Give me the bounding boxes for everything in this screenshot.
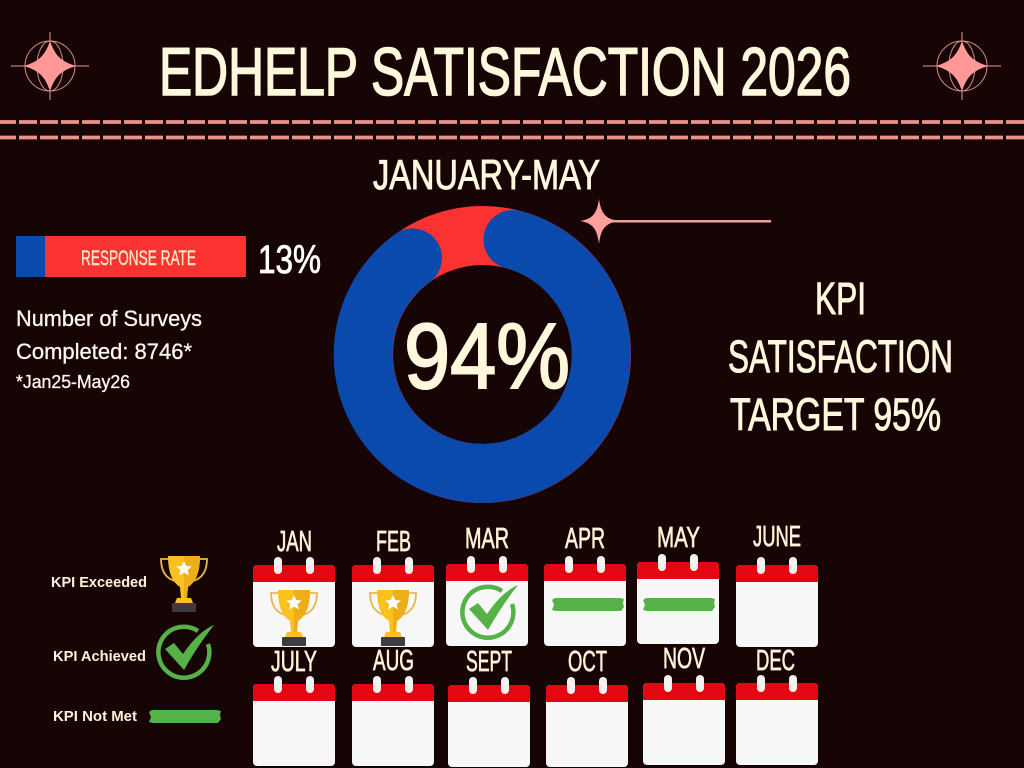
callout: sparkle line — [580, 199, 771, 244]
calendar: June — [736, 521, 818, 647]
chart: satisfaction donut — [363, 236, 602, 474]
calendar: September — [448, 646, 530, 767]
calendar: October — [546, 646, 628, 767]
calendar: February: FEB — [376, 526, 411, 558]
calendar: August: AUG — [373, 645, 414, 677]
calendar: March: MAR — [465, 523, 509, 555]
legend: KPI achieved — [53, 625, 214, 678]
calendar: December: DEC — [756, 645, 795, 677]
calendar: January: JAN — [277, 526, 312, 558]
calendar: August — [352, 645, 434, 766]
legend: KPI exceeded — [51, 556, 207, 612]
period heading: JANUARY-MAY — [373, 151, 600, 198]
icon: right sparkle globe — [923, 32, 1001, 100]
legend: KPI achieved: KPI Achieved — [53, 648, 146, 665]
calendar: June: JUNE — [753, 521, 801, 553]
calendar: November: NOV — [663, 643, 705, 675]
calendar: May: MAY — [657, 522, 700, 554]
survey count text: *Jan25-May26 — [16, 372, 130, 392]
response rate value: 13% — [258, 238, 321, 282]
survey count text: Number of Surveys — [16, 306, 202, 331]
calendar: March — [446, 523, 528, 646]
calendar: July — [253, 646, 335, 766]
legend: KPI not met: KPI Not Met — [53, 708, 137, 725]
legend: KPI not met — [53, 708, 221, 725]
calendar: October: OCT — [568, 646, 607, 678]
legend: KPI exceeded: KPI Exceeded — [51, 574, 147, 591]
calendar: December — [736, 645, 818, 765]
survey count text: Completed: 8746* — [16, 339, 192, 364]
KPI target text: TARGET 95% — [730, 389, 941, 440]
response rate bar: RESPONSE RATE — [81, 247, 196, 270]
calendar: September: SEPT — [466, 646, 512, 678]
icon: left sparkle globe — [11, 32, 89, 100]
calendar: November — [643, 643, 725, 765]
calendar: February — [352, 526, 434, 647]
calendar: April: APR — [565, 523, 605, 555]
calendar: May — [637, 522, 719, 644]
calendar: April — [544, 523, 626, 646]
response rate bar — [16, 236, 246, 277]
donut value: 94% — [404, 304, 570, 408]
KPI target text: KPI — [815, 273, 866, 324]
calendar: July: JULY — [271, 646, 317, 678]
KPI target text — [728, 273, 953, 440]
calendar: January — [253, 526, 335, 647]
survey count text — [16, 306, 202, 392]
